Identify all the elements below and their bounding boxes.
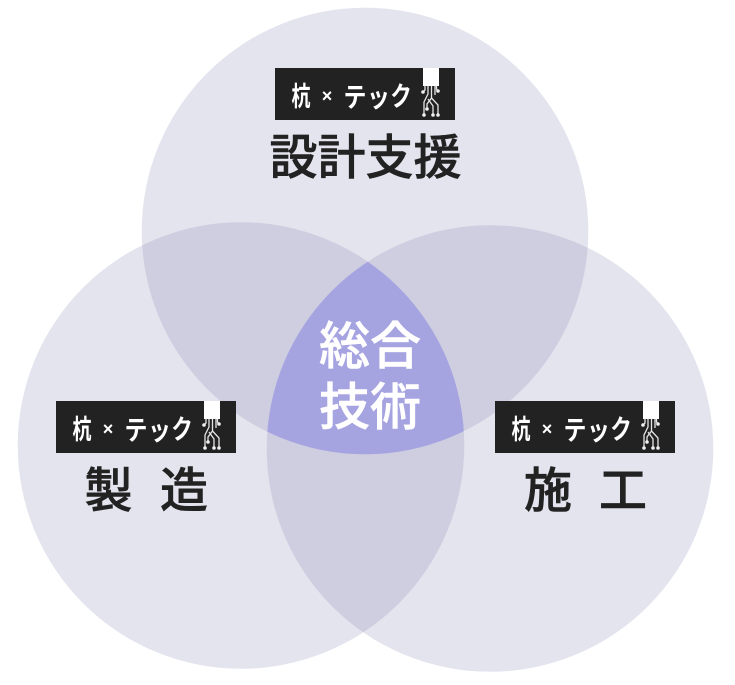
- badge: right: ×: [542, 419, 552, 439]
- overlap: top and left: [142, 222, 368, 432]
- badge: top: 杭: [292, 82, 310, 112]
- overlap: center of all three: [268, 262, 464, 454]
- heading: design support: 設計支援: [269, 132, 462, 185]
- center label: integrated technology: 技術: [319, 379, 421, 436]
- circle: design support: [142, 8, 588, 454]
- icon: chip with circuit traces: [202, 401, 221, 450]
- heading: construction: [524, 465, 647, 518]
- badge: right: テ: [564, 416, 586, 446]
- badge: left: 杭: [73, 415, 91, 445]
- badge: top: テ: [344, 83, 366, 113]
- badge: top: ッ: [367, 83, 390, 113]
- badge: left: ッ: [148, 416, 171, 446]
- circle: construction: [267, 225, 713, 672]
- heading: construction: 工: [599, 465, 647, 518]
- badge: right: 杭: [512, 415, 530, 445]
- center label: integrated technology: 総合: [319, 318, 421, 375]
- badge: left: [56, 401, 236, 453]
- circle: manufacturing: [18, 222, 464, 669]
- heading: manufacturing: 造: [160, 465, 208, 518]
- badge: left: ク: [171, 415, 193, 446]
- badge: right: [495, 401, 675, 453]
- badge: top: ×: [322, 86, 332, 106]
- badge: right: ク: [610, 415, 632, 446]
- icon: chip with circuit traces: [641, 401, 660, 450]
- center label: integrated technology: [319, 318, 421, 436]
- badge: left: ×: [103, 419, 113, 439]
- overlap: left and right: [266, 432, 464, 632]
- badge: left: テ: [125, 416, 147, 446]
- badge: top: ク: [390, 82, 412, 113]
- badge: right: ッ: [587, 416, 610, 446]
- badge: top: [275, 68, 455, 120]
- overlap: top and right: [368, 225, 588, 431]
- heading: construction: 施: [524, 465, 572, 518]
- heading: manufacturing: 製: [84, 465, 133, 518]
- icon: chip with circuit traces: [421, 68, 440, 117]
- heading: manufacturing: [84, 465, 208, 518]
